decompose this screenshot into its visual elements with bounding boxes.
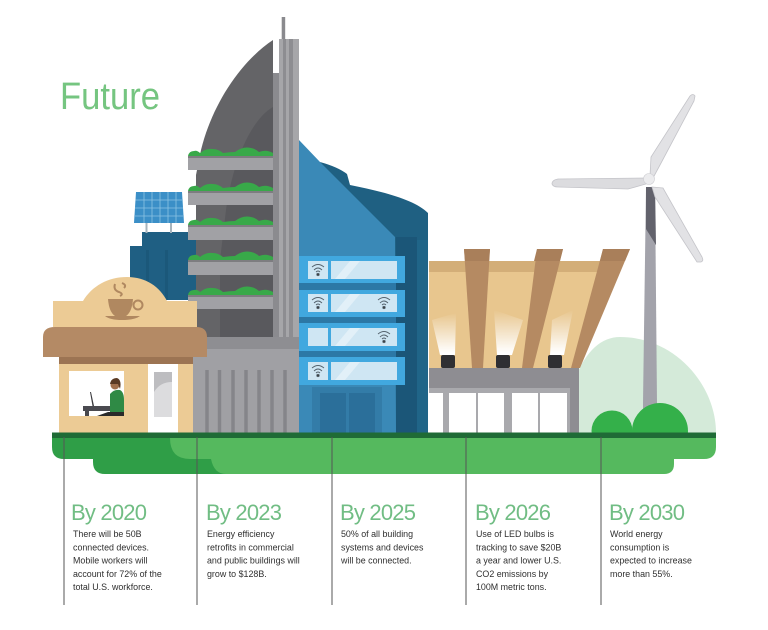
cafe door	[148, 364, 178, 433]
milestone: by 2026: a year and lower U.S.	[476, 556, 561, 566]
milestone: by 2020	[71, 500, 162, 592]
cafe awning	[43, 327, 207, 357]
milestone: by 2020: total U.S. workforce.	[73, 582, 153, 592]
window band: floor 3	[299, 323, 405, 351]
milestone: by 2026: 100M metric tons.	[476, 582, 547, 592]
window band: floor 1	[299, 256, 405, 283]
green balcony 3	[188, 216, 273, 240]
stadium building	[429, 249, 630, 433]
back building behind cafe	[130, 232, 198, 300]
ground	[52, 432, 716, 474]
spotlights	[441, 355, 562, 368]
window band: floor 2	[299, 290, 405, 317]
milestone: by 2026: Use of LED bulbs is	[476, 529, 555, 539]
bushes	[592, 403, 688, 459]
wind turbine	[552, 94, 703, 433]
cafe wall	[59, 364, 193, 433]
grey base building	[193, 337, 299, 433]
milestone: by 2030: consumption is	[610, 542, 670, 552]
green balcony 1	[188, 148, 273, 170]
grey dome tower	[196, 40, 279, 340]
milestone: by 2025: will be connected.	[340, 556, 412, 566]
milestone: by 2026: By 2026	[475, 500, 551, 525]
milestone: by 2030: expected to increase	[610, 556, 692, 566]
roof beams	[464, 249, 630, 368]
stadium base with windows	[429, 368, 579, 433]
milestone: by 2030	[609, 500, 692, 579]
cafe sign	[53, 277, 197, 327]
milestone: by 2030: more than 55%.	[610, 569, 673, 579]
title: Future	[60, 76, 160, 118]
dark blue rear tower	[320, 162, 428, 433]
milestone: by 2030: By 2030	[609, 500, 685, 525]
milestone: by 2020: connected devices.	[73, 542, 149, 552]
milestone: by 2030: World energy	[610, 529, 663, 539]
milestone: by 2023: grow to $128B.	[207, 569, 267, 579]
milestone: by 2020: By 2020	[71, 500, 147, 525]
milestone: by 2023: By 2023	[206, 500, 282, 525]
icon: wifi	[312, 366, 324, 377]
icon: wifi	[312, 298, 324, 309]
milestone: by 2026: tracking to save $20B	[476, 542, 561, 552]
milestone: by 2025: 50% of all building	[341, 529, 413, 539]
background hill	[575, 337, 716, 433]
milestone: by 2023	[206, 500, 300, 579]
icon: coffee cup	[105, 283, 142, 320]
cafe window	[69, 371, 124, 416]
milestone: by 2020: There will be 50B	[73, 529, 142, 539]
milestone: by 2020: account for 72% of the	[73, 569, 162, 579]
icon: wifi	[378, 332, 390, 343]
milestone: by 2026: CO2 emissions by	[476, 569, 549, 579]
icon: wifi	[312, 264, 324, 276]
milestone: by 2023: and public buildings will	[207, 556, 300, 566]
milestone: by 2023: retrofits in commercial	[207, 542, 294, 552]
icon: wifi	[378, 298, 390, 309]
milestone: by 2025	[340, 500, 424, 566]
milestone: by 2025: By 2025	[340, 500, 416, 525]
green balcony 4	[188, 252, 273, 275]
milestone: by 2026	[475, 500, 561, 592]
green balcony 5	[188, 286, 273, 309]
milestone: by 2023: Energy efficiency	[207, 529, 275, 539]
cafe	[43, 277, 207, 433]
milestone: by 2025: systems and devices	[341, 542, 424, 552]
central grey column	[279, 17, 299, 339]
timeline dividers	[64, 437, 601, 605]
window band: floor 4	[299, 357, 405, 385]
green balcony 2	[188, 182, 273, 205]
light beams	[432, 310, 573, 355]
blue building	[299, 140, 428, 433]
icon: solar panel	[134, 192, 184, 233]
milestone: by 2020: Mobile workers will	[73, 556, 147, 566]
person with laptop	[83, 378, 124, 416]
